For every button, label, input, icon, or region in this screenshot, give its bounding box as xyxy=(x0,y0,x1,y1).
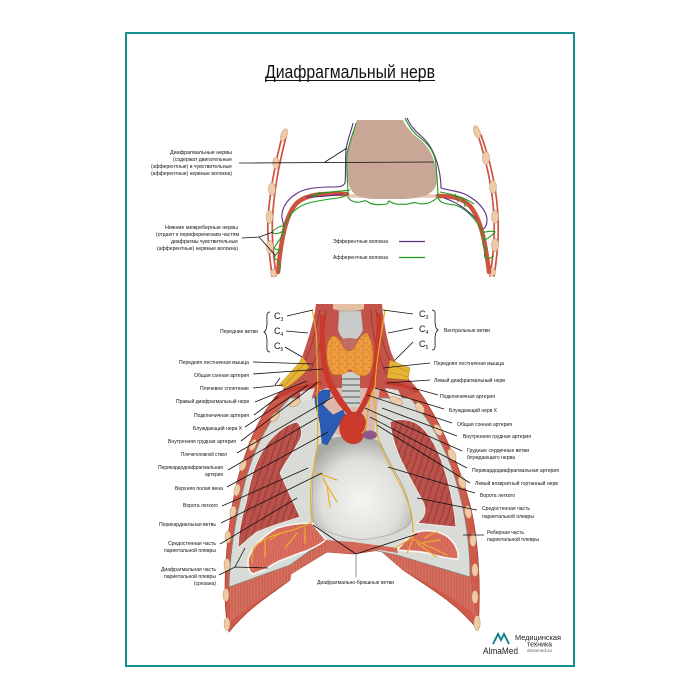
label: subclavian artery, left xyxy=(194,397,278,419)
logo: AlmaMed: AlmaMed xyxy=(483,646,518,657)
label: pericardiacophrenic artery, right xyxy=(370,417,559,474)
legend: afferent fibres xyxy=(333,255,425,261)
label: subclavian artery, right xyxy=(413,388,495,400)
label: right phrenic nerve xyxy=(176,381,307,405)
label: cardiac branches of vagus: блуждающего нерва xyxy=(467,455,516,461)
logo: AlmaMed xyxy=(483,634,561,657)
label: subclavian artery, right: Подключичная артерия xyxy=(440,394,495,400)
label: common carotid artery, right: Общая сонная артерия xyxy=(457,422,512,428)
logo: AlmaMed: almamed.su xyxy=(527,648,553,653)
cervical roots, left: 5 xyxy=(280,347,284,353)
neck muscle fibres xyxy=(304,310,392,374)
label: pericardiacophrenic artery, left: Перикардодиафрагмальная xyxy=(158,465,223,471)
rib cartilages, right xyxy=(388,395,480,630)
afferent nerve fibres, green xyxy=(272,118,495,272)
label: brachiocephalic trunk xyxy=(181,397,333,458)
label: anterior scalene muscle, right: Передняя лестничная мышца xyxy=(434,361,505,367)
label: lower intercostal nerves: Нижние межреберные нервы xyxy=(165,225,238,231)
diaphragm muscle arc xyxy=(278,194,489,272)
label: phrenic nerves composition xyxy=(151,148,434,177)
label: phrenic nerves composition: Диафрагмальные нервы xyxy=(170,150,232,156)
label: anterior scalene muscle, right xyxy=(383,361,505,368)
main anatomical illustration xyxy=(223,304,480,632)
label: diaphragmatic parietal pleura: париетальной плевры xyxy=(164,573,216,580)
label: brachial plexus: Плечевое сплетение xyxy=(200,386,249,392)
label: common carotid artery, right xyxy=(367,395,512,428)
cervical roots, right: 3 xyxy=(426,315,428,321)
cervical roots, right: C xyxy=(419,339,426,349)
label: internal thoracic artery, right: Внутренняя грудная артерия xyxy=(463,434,531,440)
label: internal thoracic artery, left xyxy=(168,382,318,445)
superior vena cava, blue xyxy=(315,390,345,445)
mediastinum block xyxy=(347,120,437,199)
label: cardiac branches of vagus xyxy=(365,408,529,461)
aortic arch xyxy=(340,412,366,444)
label: vagus nerve, left xyxy=(193,385,308,432)
lower diaphragm band, right xyxy=(380,550,477,618)
label: anterior scalene muscle, left xyxy=(179,360,313,366)
legend: efferent fibres: Эфферентные волокна xyxy=(333,239,389,245)
right chest wall with ribs xyxy=(472,125,498,276)
trachea xyxy=(342,372,360,407)
label: pericardiacophrenic artery, left xyxy=(158,418,317,478)
yellow phrenic and vagus nerves xyxy=(252,310,447,563)
label: mediastinal parietal pleura, right xyxy=(417,498,534,520)
label: pericardial branch xyxy=(159,473,322,528)
tracheal rings xyxy=(342,379,360,403)
right lung and inner chest wall xyxy=(390,420,456,527)
label: costal parietal pleura: париетальной плевры xyxy=(487,536,539,543)
cervical roots, right xyxy=(383,309,438,360)
pericardium and heart xyxy=(312,437,411,539)
legend: afferent fibres: Афферентные волокна xyxy=(333,255,389,261)
left chest wall with ribs xyxy=(266,128,289,277)
cervical roots, left: C xyxy=(274,326,280,336)
left brachial plexus, yellow xyxy=(279,357,309,388)
top diagram: section through the diaphragm xyxy=(266,118,498,277)
cervical roots, right: 5 xyxy=(426,345,428,351)
label: phrenic nerves composition: (содержат двигательные xyxy=(173,157,232,163)
label: phrenicoabdominal branches xyxy=(313,525,417,586)
label: internal thoracic artery, left: Внутренняя грудная артерия xyxy=(168,439,236,445)
plexus cords xyxy=(284,363,409,386)
label: hilum of lung, right xyxy=(388,467,515,499)
label: superior vena cava: Верхняя полая вена xyxy=(175,486,224,492)
logo: AlmaMed: Медицинская xyxy=(515,635,561,642)
label: internal thoracic artery, right xyxy=(382,408,531,440)
right brachial plexus, yellow xyxy=(387,360,410,380)
lower diaphragm band, left xyxy=(230,543,327,622)
label: pericardial branch: Перикардиальная ветвь xyxy=(159,522,216,528)
left lung and inner chest wall xyxy=(238,422,302,548)
cervical roots, left: C xyxy=(274,311,280,321)
label: hilum of lung, left: Ворота легкого xyxy=(183,503,218,509)
neck muscles xyxy=(278,304,420,398)
label: mediastinal parietal pleura, left: Средостенная часть xyxy=(168,541,216,547)
carotid arteries xyxy=(320,313,381,414)
label: mediastinal parietal pleura, left: париетальной плевры xyxy=(164,547,216,554)
pleural cavity lining xyxy=(229,398,470,587)
label: pericardiacophrenic artery, right: Перикардодиафрагмальная артерия xyxy=(472,468,559,474)
cervical roots, left: C xyxy=(274,341,280,351)
labels, right column xyxy=(365,361,559,543)
rib cartilages, left xyxy=(223,397,302,630)
label: common carotid artery, left xyxy=(194,369,323,379)
label: mediastinal parietal pleura, left xyxy=(164,498,297,554)
label: phrenic nerves composition: (эфферентные) и чувствительные xyxy=(151,164,232,170)
label: vagus nerve, left: Блуждающий нерв X xyxy=(193,425,242,432)
left diaphragm dome xyxy=(248,523,326,574)
cervical roots, right: 4 xyxy=(426,330,428,336)
cervical roots, left xyxy=(264,310,313,357)
label: lower intercostal nerves: (отдают к периферическим частям xyxy=(156,232,239,238)
mediastinal tissue behind the great vessels xyxy=(322,388,380,438)
label: left recurrent laryngeal nerve: Левый возвратный гортанный нерв xyxy=(475,480,558,487)
right diaphragm dome xyxy=(397,531,458,559)
label: left recurrent laryngeal nerve xyxy=(377,425,558,487)
label: brachial plexus xyxy=(200,378,283,392)
label: vagus nerve, right xyxy=(375,388,497,414)
hyoid and tan neck band xyxy=(333,304,364,311)
title: Диафрагмальный нерв xyxy=(265,62,435,82)
label: superior vena cava xyxy=(175,432,328,492)
label: left phrenic nerve xyxy=(387,377,505,384)
legend: efferent fibres xyxy=(333,239,425,245)
larynx pink tissue xyxy=(337,338,361,350)
cervical roots, left: 4 xyxy=(280,332,284,338)
label: mediastinal parietal pleura, right: париетальной плевры xyxy=(482,513,534,520)
label: left phrenic nerve: Левый диафрагмальный нерв xyxy=(434,377,505,384)
label: diaphragmatic parietal pleura: (срезана) xyxy=(194,581,216,587)
cervical roots, right: C xyxy=(419,324,426,334)
label: vagus nerve, right: Блуждающий нерв X xyxy=(449,407,497,414)
label: ventral rami: Вентральные ветви xyxy=(444,328,490,334)
label: hilum of lung, right: Ворота легкого xyxy=(480,493,515,499)
label: common carotid artery, left: Общая сонная артерия xyxy=(194,373,249,379)
label: subclavian artery, left: Подключичная артерия xyxy=(194,413,249,419)
label: right phrenic nerve: Правый диафрагмальный нерв xyxy=(176,398,249,405)
label: diaphragmatic parietal pleura: Диафрагмальная часть xyxy=(161,567,216,573)
labels, left column xyxy=(158,360,333,587)
efferent nerve fibres, purple xyxy=(282,118,487,229)
label: anterior rami: Передние ветви xyxy=(220,329,258,335)
label: phrenic nerves composition: (афферентные) нервные волокна) xyxy=(151,171,232,177)
label: lower intercostal nerves: (афферентные) нервные волокна) xyxy=(157,246,238,252)
cervical roots, left: 3 xyxy=(280,317,284,323)
label: lower intercostal nerves: диафрагмы чувствительные xyxy=(171,239,238,245)
label: costal parietal pleura: Реберная часть xyxy=(487,530,524,536)
label: anterior scalene muscle, left: Передняя лестничная мышца xyxy=(179,360,250,366)
larynx xyxy=(338,311,363,341)
label: mediastinal parietal pleura, right: Средостенная часть xyxy=(482,506,530,512)
thyroid gland xyxy=(327,333,373,376)
subclavian arteries xyxy=(276,383,417,398)
pulmonary trunk, purple xyxy=(363,430,377,440)
label: pericardiacophrenic artery, left: артерия xyxy=(205,472,223,478)
label: hilum of lung, left xyxy=(183,468,308,509)
central diaphragm xyxy=(325,540,398,554)
label: cardiac branches of vagus: Грудные сердечные ветви xyxy=(467,448,529,454)
label: lower intercostal nerves xyxy=(156,225,275,255)
label: brachiocephalic trunk: Плечеголовной ствол xyxy=(181,451,227,458)
logo icon xyxy=(493,634,509,644)
label: diaphragmatic parietal pleura xyxy=(161,548,268,587)
pale brachial plexus roots under the subclavian arteries xyxy=(300,388,402,402)
logo: AlmaMed: техника xyxy=(527,642,552,648)
label: costal parietal pleura xyxy=(463,530,539,543)
cervical roots, right: C xyxy=(419,309,426,319)
page frame xyxy=(126,33,574,666)
chest wall silhouette xyxy=(225,390,479,632)
label: phrenicoabdominal branches: Диафрагмально-брюшные ветви xyxy=(317,580,394,586)
